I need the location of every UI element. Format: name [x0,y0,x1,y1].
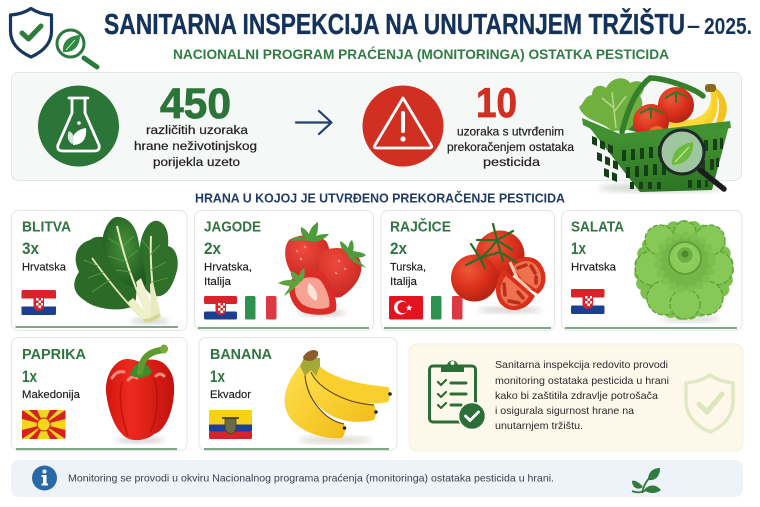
panel: jagode: JAGODE [204,218,261,236]
handle [622,78,703,132]
panel: key statistics [12,72,742,180]
icon: info [32,466,57,490]
panel: blitva: 3x [22,240,40,258]
flag: North Macedonia [22,410,66,439]
text: exceeded samples: prekoračenjem ostataka [447,142,575,154]
tomatoes [658,87,694,123]
panel: paprika: PAPRIKA [22,346,86,363]
flag: Ecuador [209,410,252,439]
panel: banana [199,338,397,450]
text: exceeded samples [447,126,575,169]
flag: Italy [245,296,276,320]
icon: magnifier with leaf [57,30,97,67]
text: samples taken: porijekla uzeto [153,157,240,169]
panel: salata [562,210,742,330]
panel: blitva: BLITVA [22,218,71,236]
panel: banana: 1x [210,368,226,386]
illustration: bananas [285,350,392,444]
text: inspection statement: kako bi zaštitila zdravlje potrošača [495,390,658,402]
icon: sprout [632,468,661,493]
title: – [687,13,700,38]
text: inspection statement: unutarnjem tržištu. [495,420,583,432]
panel: blitva: Hrvatska [22,262,67,274]
flag: Croatia [22,290,56,315]
panel: salata: SALATA [571,218,624,236]
text: exceeded samples: pesticida [483,157,541,169]
illustration: lettuce [635,221,733,322]
panel: rajcice: 2x [390,240,408,258]
panel: banana: BANANA [210,346,272,363]
panel: jagode: Hrvatska, [204,262,252,274]
icon: shield with check [10,8,52,57]
illustration: chard [74,217,178,324]
panel: salata: 1x [571,240,587,258]
panel: paprika [12,338,187,450]
illustration: tomatoes [451,224,545,313]
text: samples taken: različitih uzoraka [146,125,249,137]
panel: jagode: Italija [204,276,232,288]
icon: clipboard checklist [430,360,486,430]
panel: jagode [194,210,374,330]
panel: salata: Hrvatska [571,262,617,274]
title: 2025. [704,13,752,39]
magnifier [700,170,724,189]
flag: Turkey [389,296,423,320]
panel: rajcice [381,210,554,330]
lettuce [579,78,644,131]
panel: blitva [12,210,187,330]
illustration: shopping basket [579,78,731,192]
panel: rajcice: Italija [390,276,418,288]
subtitle: NACIONALNI PROGRAM PRAĆENJA (MONITORINGA) OSTATKA PESTICIDA [173,45,669,62]
text: inspection statement [495,359,669,432]
panel: inspection note [409,344,743,451]
panel: rajcice: Turska, [390,262,426,274]
text: samples taken: hrane neživotinjskog [134,141,257,153]
flag: Italy [431,296,462,320]
number: 10: 10 [476,79,517,126]
number: 450: 450 [160,80,231,128]
icon: flask with leaf [38,86,119,166]
text: footer note: Monitoring se provodi u okviru Nacionalnog programa praćenja (monitoringa) ostataka pesticida u hrani. [68,472,554,484]
arrow [296,111,332,134]
icon: faded shield [686,375,733,432]
panel: paprika: 1x [22,368,38,386]
panel: banana: Ekvador [210,389,251,401]
flag: Croatia [204,296,237,320]
panel: paprika: Makedonija [22,389,81,401]
basket body [582,118,730,192]
illustration: red pepper [106,344,174,443]
text: inspection statement: Sanitarna inspekcija redovito provodi [495,359,668,371]
text: inspection statement: monitoring ostataka pesticida u hrani [495,375,669,387]
panel: jagode: 2x [204,240,222,258]
illustration: strawberries [278,222,366,316]
flag: Croatia [571,289,604,314]
icon: warning triangle [362,86,444,166]
heading: foods: HRANA U KOJOJ JE UTVRĐENO PREKORAČENJE PESTICIDA [195,190,565,206]
banana [669,90,718,131]
text: exceeded samples: uzoraka s utvrđenim [457,126,564,138]
text: inspection statement: i osigurala sigurnost hrane na [495,405,634,417]
panel: info footer [11,460,743,497]
text: samples taken [134,125,257,169]
panel: rajcice: RAJČICE [390,218,451,236]
